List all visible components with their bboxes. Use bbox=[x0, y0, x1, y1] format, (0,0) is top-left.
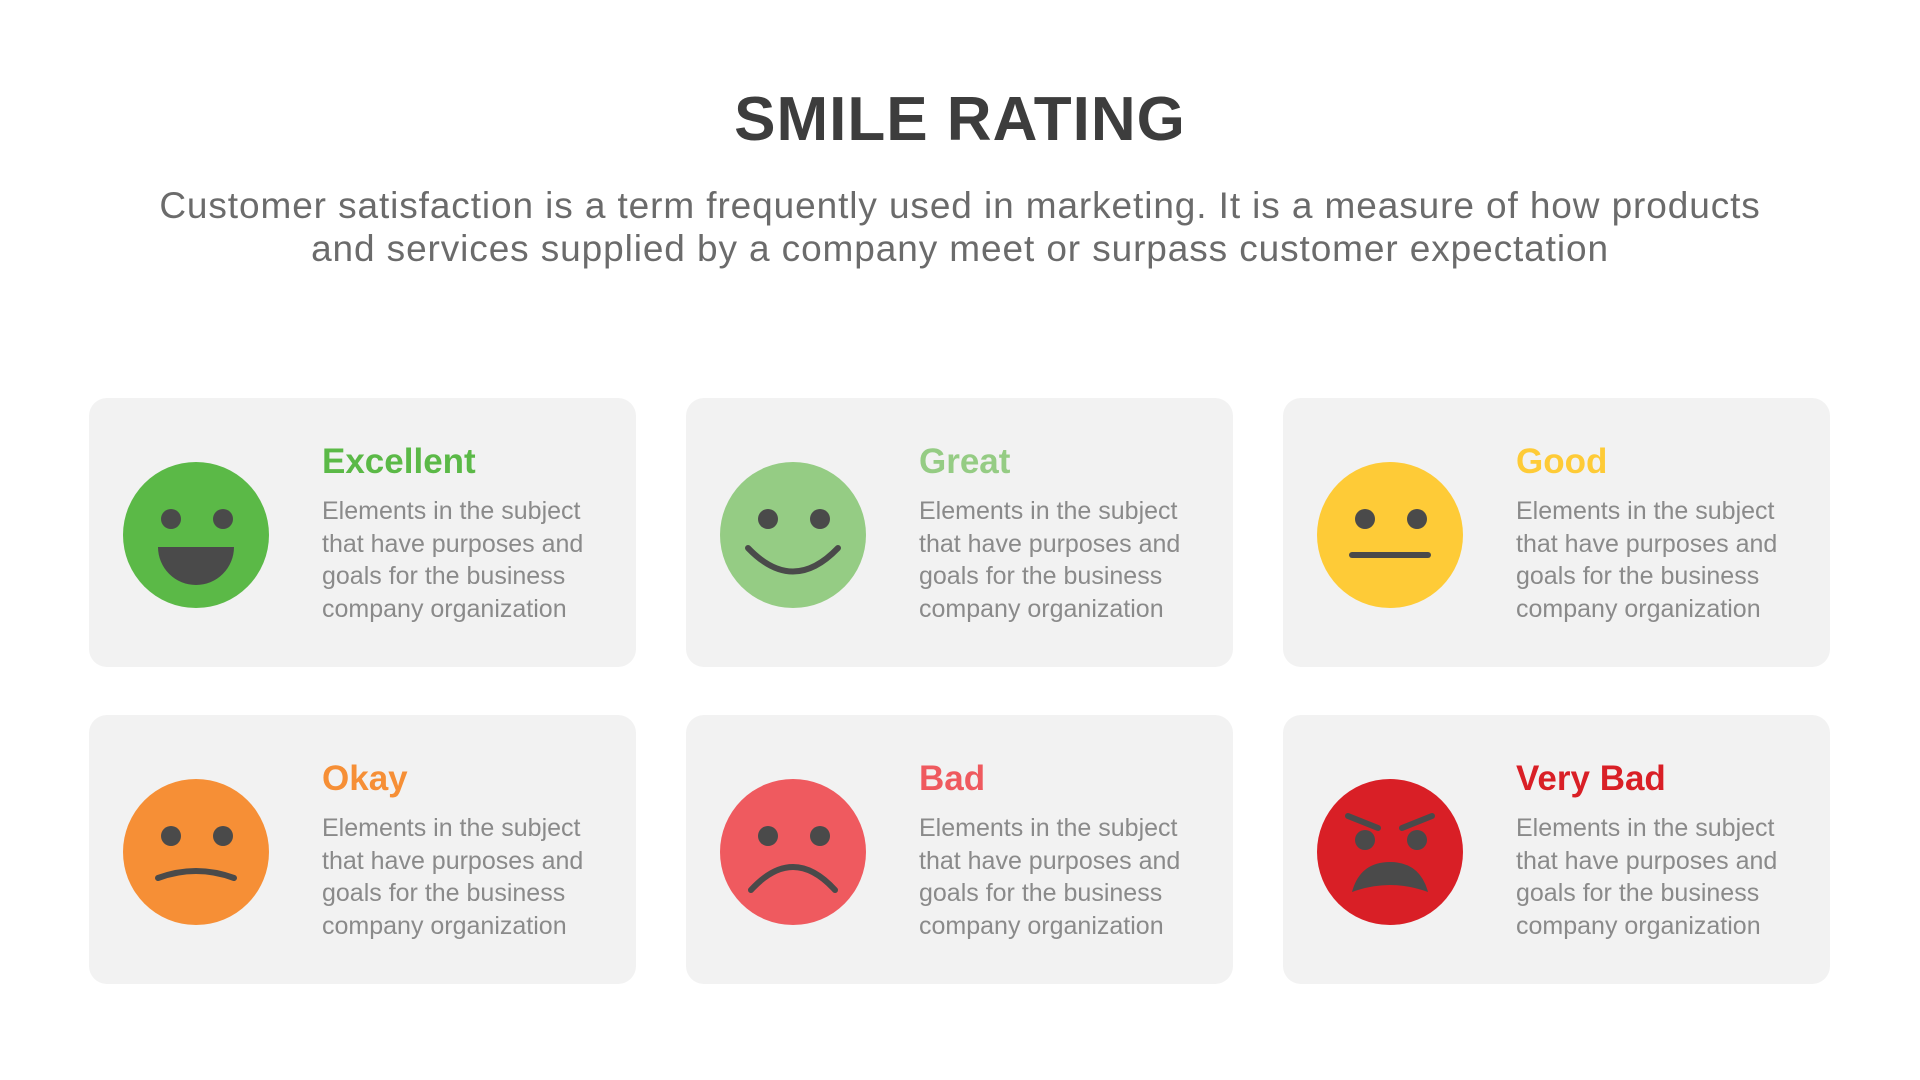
icon: great face bbox=[720, 462, 866, 608]
heading: Bad bbox=[919, 759, 985, 798]
heading: Great bbox=[919, 442, 1010, 481]
panel: great bbox=[686, 398, 1233, 667]
panel: okay bbox=[89, 715, 636, 984]
text: Elements in the subject that have purposes and goals for the business company organization bbox=[919, 497, 1180, 622]
subtitle: Customer satisfaction is a term frequently used in marketing. It is a measure of how products bbox=[159, 185, 1761, 226]
icon: excellent face bbox=[123, 462, 269, 608]
panel: very bad bbox=[1283, 715, 1830, 984]
text: Elements in the subject that have purposes and goals for the business company organization bbox=[919, 814, 1180, 940]
heading: Good bbox=[1516, 442, 1607, 481]
heading: Very Bad bbox=[1516, 759, 1666, 798]
panel: excellent bbox=[89, 398, 636, 667]
title: SMILE RATING bbox=[734, 85, 1186, 154]
text: Elements in the subject that have purposes and goals for the business company organization bbox=[1516, 497, 1777, 622]
icon: okay face bbox=[123, 779, 269, 925]
heading: Okay bbox=[322, 759, 408, 798]
subtitle: and services supplied by a company meet or surpass customer expectation bbox=[311, 228, 1609, 269]
icon: bad face bbox=[720, 779, 866, 925]
heading: Excellent bbox=[322, 442, 476, 481]
panel: bad bbox=[686, 715, 1233, 984]
panel: good bbox=[1283, 398, 1830, 667]
subtitle bbox=[159, 185, 1761, 269]
icon: good face bbox=[1317, 462, 1463, 608]
text: Elements in the subject that have purposes and goals for the business company organization bbox=[1516, 814, 1777, 940]
icon: very bad face bbox=[1317, 779, 1463, 925]
text: Elements in the subject that have purposes and goals for the business company organization bbox=[322, 814, 583, 940]
text: Elements in the subject that have purposes and goals for the business company organization bbox=[322, 497, 583, 622]
